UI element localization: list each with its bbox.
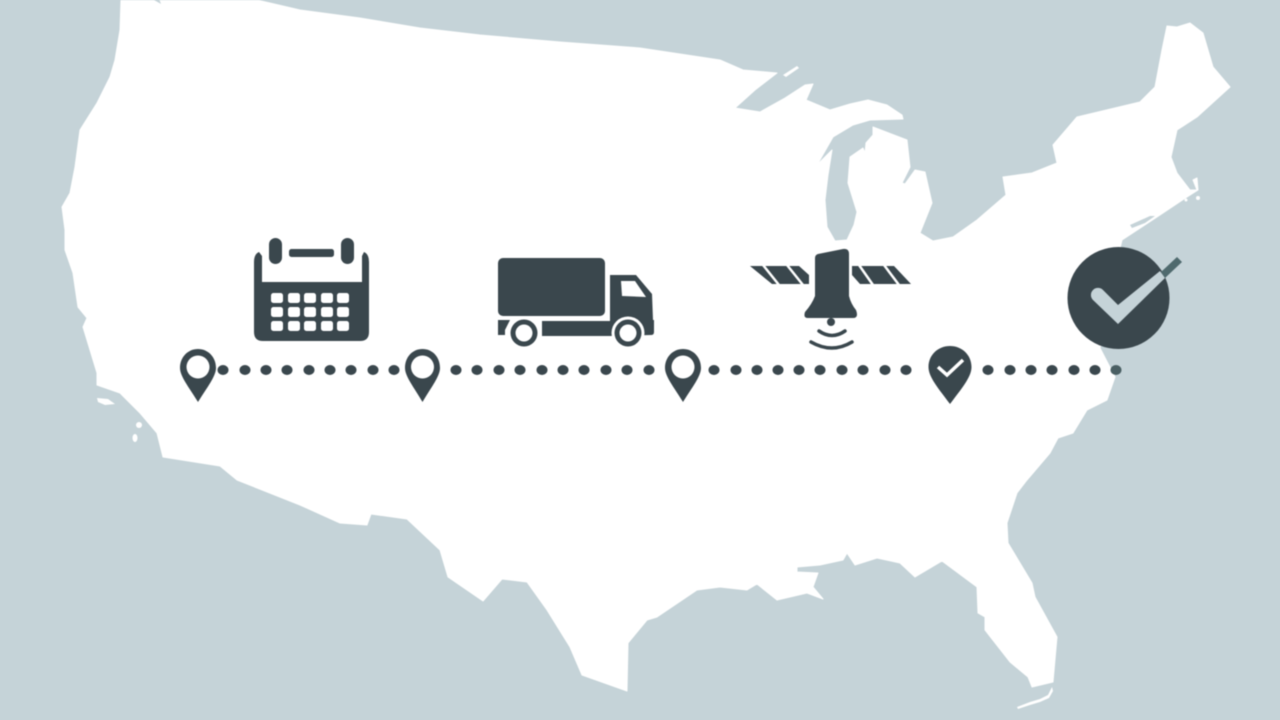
location pin with check mark [928,346,972,404]
icon: large check mark badge [1068,247,1182,349]
location pin 1 [180,349,216,402]
location pin 2 [405,349,440,402]
dotted route segment 2 [450,365,654,375]
dotted route segment 4 [982,365,1122,375]
map detail: Nantucket and Martha's Vineyard [1184,196,1200,202]
icon: delivery truck [498,258,654,350]
dotted route segment 3 [708,365,912,375]
map detail: Channel Islands [97,398,142,442]
location pin 3 [665,349,701,402]
icon: satellite [750,249,911,348]
map detail: Long Island Sound [1130,216,1155,228]
dotted route segment 1 [218,365,400,375]
map detail: Florida Keys [1017,687,1053,709]
map detail: Isle Royale [783,66,799,77]
icon: calendar [254,238,369,341]
